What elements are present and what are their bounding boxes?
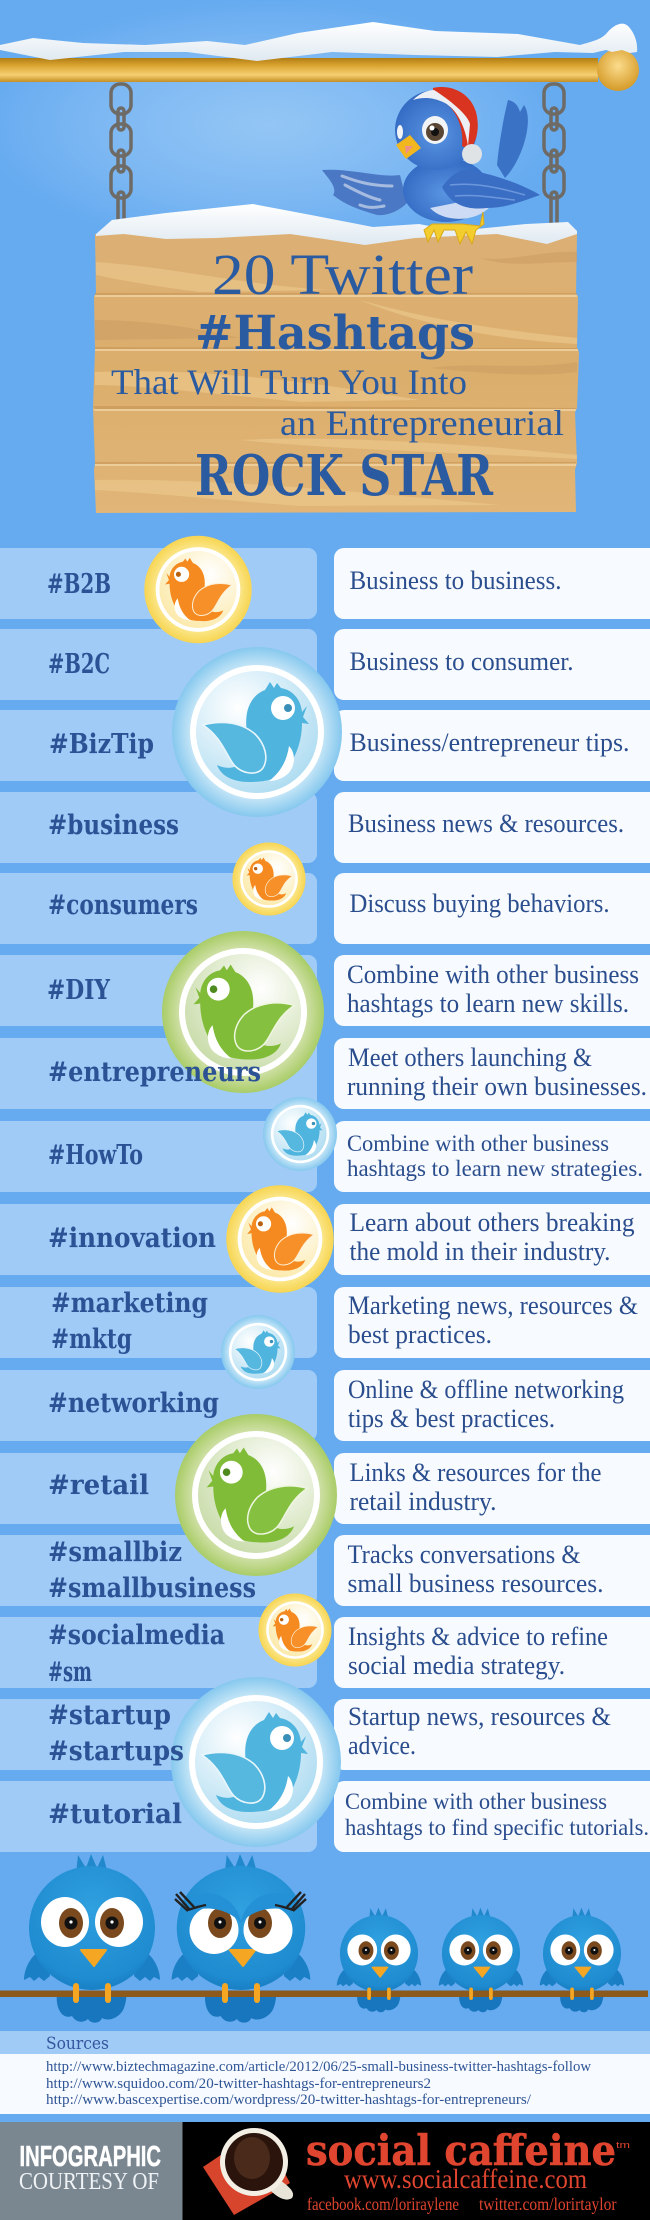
icon: small yellow badge 4	[258, 1593, 332, 1667]
icon: yellow badge 1	[144, 536, 252, 643]
hashtag: startup and startups	[48, 1700, 184, 1767]
icon: big green badge 2	[175, 1414, 337, 1576]
title line: an Entrepreneurial: an Entrepreneurial	[280, 403, 564, 443]
twitter handle: twitter.com/lorirtaylor	[479, 2194, 616, 2214]
hashtag: networking: #networking	[48, 1388, 219, 1419]
sources list background	[0, 2054, 650, 2114]
descriptions	[345, 566, 649, 1841]
description: retail	[350, 1458, 602, 1516]
description: entrepreneurs	[347, 1043, 647, 1101]
sources heading strip	[0, 2031, 650, 2054]
hashtag: startup and startups: #startup	[48, 1700, 171, 1731]
description: entrepreneurs: running their own businesses.	[347, 1072, 647, 1101]
description: BizTip: Business/entrepreneur tips.	[350, 728, 630, 757]
hashtag: DIY: #DIY	[47, 975, 111, 1006]
hashtag: marketing and mktg: #marketing	[51, 1288, 208, 1319]
icon: mother bird face	[175, 1892, 306, 1954]
hanging sign header	[0, 22, 639, 513]
title	[111, 242, 564, 509]
facebook handle: facebook.com/loriraylene	[307, 2194, 459, 2214]
icon: father bird eyes	[41, 1897, 143, 1947]
hashtag: socialmedia and sm: #sm	[48, 1657, 92, 1688]
icon: chick 3 body	[540, 1908, 624, 2012]
brand name: social caffeine	[306, 2126, 616, 2175]
icon: bluebird with santa hat	[322, 87, 540, 244]
description: networking: Online & offline networking	[348, 1375, 624, 1404]
footer brand panel	[182, 2122, 650, 2220]
description: DIY	[347, 960, 639, 1018]
description: innovation	[350, 1208, 634, 1266]
sources panel	[0, 2031, 650, 2114]
sky glow behind sign	[0, 0, 560, 250]
hashtag: consumers: #consumers	[48, 890, 198, 921]
hashtag labels	[47, 569, 261, 1830]
golden pole	[0, 49, 639, 91]
chain: right	[544, 84, 564, 228]
icon: mother bird body	[172, 1854, 310, 2023]
description: DIY: hashtags to learn new skills.	[347, 989, 629, 1018]
hashtag: tutorial: #tutorial	[48, 1799, 182, 1830]
hashtag: marketing and mktg: #mktg	[51, 1324, 132, 1355]
icon: father bird body	[24, 1854, 160, 2023]
hashtag: retail: #retail	[48, 1470, 149, 1501]
description: socialmedia: social media strategy.	[348, 1651, 565, 1680]
courtesy label: COURTESY OF	[19, 2169, 159, 2195]
description: socialmedia	[348, 1622, 608, 1680]
icon: chick 2 feet	[469, 1988, 493, 2000]
description: startup: Startup news, resources &	[348, 1702, 611, 1731]
icon: yellow badge 3	[226, 1185, 334, 1293]
website: www.socialcaffeine.com	[344, 2164, 587, 2194]
description: networking: tips & best practices.	[348, 1404, 555, 1433]
source link 1: http://www.biztechmagazine.com/article/2012/06/25-small-business-twitter-hashtags-follow	[46, 2059, 591, 2075]
description: smallbiz: small business resources.	[348, 1569, 604, 1598]
description: marketing: best practices.	[348, 1320, 492, 1349]
hashtag: BizTip: #BizTip	[49, 729, 154, 760]
icon: big green badge 1	[162, 931, 324, 1093]
description: startup	[348, 1702, 611, 1760]
hashtag: HowTo: #HowTo	[48, 1140, 143, 1171]
icon: small blue badge 2	[263, 1097, 337, 1171]
description: tutorial	[345, 1789, 649, 1841]
snow on board	[96, 204, 577, 245]
bird family on a branch	[0, 1854, 648, 2023]
description: networking	[348, 1375, 624, 1433]
description: HowTo: Combine with other business	[347, 1131, 609, 1157]
description: tutorial: Combine with other business	[345, 1789, 607, 1815]
description: marketing: Marketing news, resources &	[348, 1291, 638, 1320]
hashtag: B2B: #B2B	[47, 569, 111, 600]
hashtag: B2C: #B2C	[48, 649, 110, 680]
hashtag: innovation: #innovation	[48, 1223, 216, 1254]
sources heading: Sources	[46, 2034, 109, 2054]
icon: chick 2 eyes	[449, 1934, 513, 1965]
hashtag: smallbiz and smallbusiness: #smallbiz	[48, 1537, 182, 1568]
icon: small yellow badge 2	[232, 842, 306, 916]
icon: chick 2 body	[439, 1908, 523, 2012]
icon: mother bird feet	[222, 1983, 260, 2003]
hashtag: entrepreneurs: #entrepreneurs	[48, 1057, 261, 1088]
description: retail: retail industry.	[350, 1487, 496, 1516]
description: entrepreneurs: Meet others launching &	[348, 1043, 592, 1072]
description: startup: advice.	[348, 1731, 416, 1760]
hashtag: socialmedia and sm: #socialmedia	[48, 1620, 225, 1651]
snow on pole	[0, 22, 637, 61]
description: retail: Links & resources for the	[350, 1458, 602, 1487]
description: innovation: Learn about others breaking	[350, 1208, 634, 1237]
bird badges	[144, 536, 342, 1847]
hashtag: socialmedia and sm	[48, 1620, 225, 1688]
description: B2C: Business to consumer.	[350, 647, 574, 676]
description: B2B: Business to business.	[350, 566, 562, 595]
icon: father bird feet	[73, 1983, 111, 2003]
icon: big blue badge 1	[172, 647, 342, 817]
branch	[0, 1990, 648, 1997]
chain: left	[111, 84, 131, 222]
icon: chick 1 eyes	[347, 1934, 411, 1965]
trademark: tm	[616, 2140, 630, 2150]
source link 2: http://www.squidoo.com/20-twitter-hashtags-for-entrepreneurs2	[46, 2076, 431, 2092]
icon: big blue badge 4	[171, 1677, 341, 1847]
description: HowTo	[347, 1131, 643, 1182]
description: marketing	[348, 1291, 638, 1349]
description: socialmedia: Insights & advice to refine	[348, 1622, 608, 1651]
description: business: Business news & resources.	[348, 809, 624, 838]
footer credit panel	[0, 2122, 182, 2220]
description: smallbiz: Tracks conversations &	[348, 1540, 580, 1569]
description: consumers: Discuss buying behaviors.	[350, 889, 610, 918]
infographic label: INFOGRAPHIC	[20, 2141, 161, 2173]
icon: chick 3 eyes	[550, 1934, 614, 1965]
title line: ROCK STAR: ROCK STAR	[195, 443, 493, 509]
source link 3: http://www.bascexpertise.com/wordpress/20-twitter-hashtags-for-entrepreneurs/	[46, 2092, 532, 2108]
title line: That Will Turn You Into: That Will Turn You Into	[111, 362, 467, 402]
left hashtag panels	[0, 548, 317, 1852]
hashtag: smallbiz and smallbusiness	[48, 1537, 256, 1604]
hashtag: business: #business	[48, 810, 179, 841]
title line: 20 Twitter: 20 Twitter	[212, 242, 473, 307]
icon: chick 1 body	[337, 1908, 421, 2012]
wooden board	[93, 234, 579, 513]
icon: small blue badge 3	[221, 1315, 295, 1389]
footer	[0, 2122, 650, 2220]
hashtag: smallbiz and smallbusiness: #smallbusiness	[48, 1573, 256, 1604]
description: smallbiz	[348, 1540, 604, 1598]
hashtag: marketing and mktg	[51, 1288, 208, 1355]
description: DIY: Combine with other business	[347, 960, 639, 989]
hashtag: startup and startups: #startups	[48, 1736, 184, 1767]
icon: chick 3 feet	[570, 1988, 594, 2000]
description: HowTo: hashtags to learn new strategies.	[347, 1156, 643, 1182]
title line: #Hashtags: #Hashtags	[195, 306, 475, 361]
description: innovation: the mold in their industry.	[350, 1237, 610, 1266]
icon: chick 1 feet	[367, 1988, 391, 2000]
icon: coffee cup on napkin	[203, 2128, 293, 2215]
right description panels	[334, 548, 650, 1852]
